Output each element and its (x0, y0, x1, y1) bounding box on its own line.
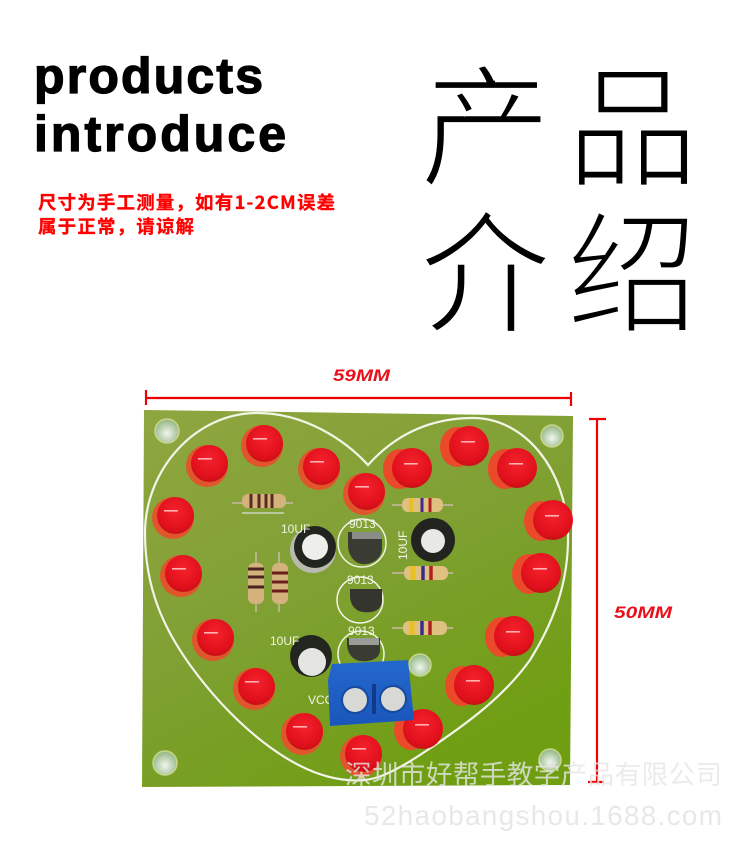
board silkscreen labels: 9013 (349, 517, 376, 531)
note: measurement tolerance: 属于正常，请谅解 (38, 213, 194, 239)
board silkscreen labels: 10UF (281, 522, 310, 536)
note: measurement tolerance: 尺寸为手工测量，如有1-2CM误差 (38, 189, 335, 215)
title: products introduce (34, 48, 286, 162)
board silkscreen labels: 10UF (396, 531, 410, 560)
width dimension: 59MM (146, 366, 571, 406)
heading: 产品介绍: 介 (419, 169, 552, 361)
blue screw terminal (328, 660, 414, 726)
resistors (232, 494, 453, 635)
board (142, 410, 573, 787)
title: products introduce: introduce (34, 106, 286, 162)
heading: 产品介绍: 绍 (566, 169, 699, 361)
board silkscreen labels: 9013 (348, 624, 375, 638)
mounting holes (153, 419, 563, 775)
heading: 产品介绍: 产 (419, 23, 552, 215)
board silkscreen labels: 10UF (270, 634, 299, 648)
heading: 产品介绍: 品 (566, 23, 699, 215)
board silkscreen labels: VCC (308, 693, 334, 707)
watermark: company name and shop URL (345, 760, 722, 831)
width dimension: 59MM: 59MM (333, 366, 391, 385)
height dimension: 50MM: 50MM (614, 603, 673, 622)
red LEDs (152, 425, 573, 777)
board silkscreen labels: 9013 (347, 573, 374, 587)
heading: 产品介绍 (419, 23, 699, 361)
title: products introduce: products (34, 48, 263, 104)
transistors (337, 519, 386, 677)
board silkscreen labels (270, 517, 410, 707)
capacitors (290, 518, 455, 677)
height dimension: 50MM (588, 419, 673, 782)
panel: heart LED circuit board (142, 410, 573, 787)
note: measurement tolerance (38, 189, 335, 239)
watermark: company name and shop URL: 52haobangshou.1688.com (364, 800, 722, 831)
watermark: company name and shop URL: 深圳市好帮手教学产品有限公司 (345, 760, 722, 790)
heart outline (145, 413, 568, 780)
